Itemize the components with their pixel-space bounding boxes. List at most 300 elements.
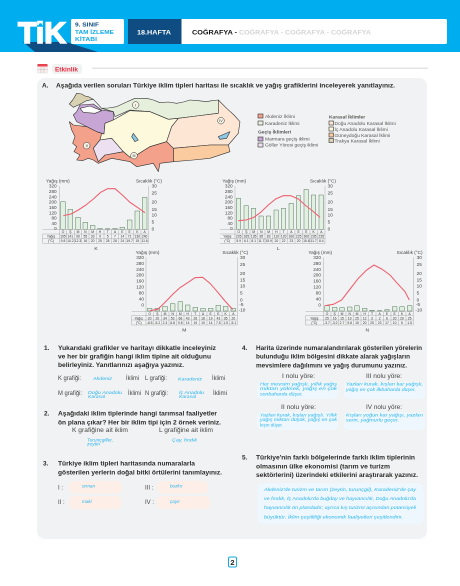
chart M: 280: [136, 261, 144, 266]
chart L: A: [320, 230, 323, 234]
chart N: M: [356, 312, 359, 316]
question 2: Turunçgiller,: [87, 438, 113, 442]
chart N: 30: [417, 255, 422, 260]
activity heading: Etkinlik: [55, 66, 79, 73]
chart K: 24: [120, 239, 124, 243]
chart L: 8.4: [319, 239, 324, 243]
question 2: [44, 410, 221, 446]
chart M: 6.8: [170, 321, 175, 325]
chart K: E: [121, 230, 124, 234]
answer: III nolu yöre: [344, 374, 425, 399]
section A instruction: Aşağıda verilen soruları Türkiye iklim tipleri haritası ile sıcaklık ve yağış grafiklerini inceleyerek yanıtlayınız.: [56, 82, 395, 89]
answer: III bozkır: III :: [145, 486, 154, 492]
chart K: 200: [49, 200, 57, 205]
chart K: M: [77, 230, 80, 234]
answer: IV nolu yöre: serin, yağmurlu geçer.: [346, 418, 399, 422]
chart N: 20: [417, 271, 422, 276]
map legend: Marmara geçiş iklimi: [265, 136, 310, 142]
chart K: 20: [91, 239, 95, 243]
chart L: 10: [328, 213, 333, 218]
week and subject bar: COĞRAFYA - COĞRAFYA - COĞRAFYA: [239, 28, 372, 36]
map legend: Doğu Anadolu Karasal İklimi: [334, 120, 396, 127]
chart L: 6.1: [244, 239, 249, 243]
chart L: 20: [274, 239, 278, 243]
chart N: 16: [333, 316, 337, 320]
chart L: 0: [230, 226, 233, 231]
chart N: -3.2: [332, 321, 338, 325]
chart M: -8.5: [147, 321, 153, 325]
region markers I to IV: I: [135, 103, 136, 107]
chart L: 22: [282, 239, 286, 243]
chart N: -3.7: [324, 321, 330, 325]
question 1: İklimi: [128, 390, 141, 397]
chart N: 12: [363, 316, 367, 320]
chart N: Sıcaklık (°C): [397, 250, 423, 255]
chart N: E: [386, 312, 389, 316]
question 1: L grafiği:: [145, 376, 167, 382]
chart N: 25: [355, 316, 359, 320]
question 1: ve her bir grafiğin hangi iklim tipine ait olduğunu: [58, 354, 211, 360]
question 1: Karasal: [179, 394, 197, 399]
chart K: 120: [49, 210, 57, 215]
chart L: M: [252, 230, 255, 234]
chart N: 320: [313, 255, 321, 260]
chart K: Sıcaklık (°C): [136, 179, 162, 184]
chart N: A: [379, 312, 382, 316]
chart L: 110: [274, 234, 279, 238]
chart L: T: [283, 230, 285, 234]
chart M: 40: [139, 297, 144, 302]
chart K: 5: [107, 234, 109, 238]
chart M: 5: [240, 290, 243, 295]
chart K: 71: [128, 234, 132, 238]
chart L: 5.9: [236, 239, 241, 243]
answer box: [257, 483, 424, 524]
chart K: 130: [135, 234, 140, 238]
chart M: 120: [136, 285, 144, 290]
chart M: 19: [201, 321, 205, 325]
chart M: 160: [136, 279, 144, 284]
map legend: Trakya Karasal İklimi: [334, 138, 380, 144]
chart M: N: [171, 312, 174, 316]
chart K: [43, 179, 162, 252]
chart L: L: [277, 246, 280, 252]
chart K: 40: [51, 221, 57, 226]
answer: I nolu yöre: sonbaharda düşer.: [260, 392, 303, 396]
chart K: E: [129, 230, 132, 234]
chart N: 120: [313, 285, 321, 290]
question 2: K grafiğine ait iklim: [72, 428, 128, 434]
chart L: 200: [225, 200, 233, 205]
chart L: 235: [319, 234, 324, 238]
main panel: [37, 78, 427, 539]
chart N: 9.8: [347, 321, 352, 325]
chart M: K: [225, 312, 228, 316]
chart K: 10: [152, 213, 157, 218]
answer: II nolu yöre: yağış miktarı düşük, yağış en çok: [259, 417, 338, 422]
chart N: 25: [417, 262, 422, 267]
chart N: N: [366, 328, 370, 334]
answer: IV çayır: çayır: [170, 499, 180, 504]
chart N: 5: [417, 290, 420, 295]
chart L: 15: [328, 207, 333, 212]
chart L: 160: [289, 234, 294, 238]
answer: III bozkır: bozkır: [170, 484, 183, 488]
chart L: 225: [296, 234, 302, 238]
chart N: 200: [313, 273, 321, 278]
map legend: Akdeniz İklimi: [265, 113, 295, 120]
chart L: 11.7: [258, 239, 265, 243]
chart M: M: [182, 328, 186, 334]
chart M: 20: [155, 316, 159, 320]
question 1: N grafiği:: [145, 391, 168, 397]
answer: III nolu yöre: Yazları kurak, kışları kar yağışlı,: [346, 382, 423, 386]
chart M: 14: [209, 321, 213, 325]
question 1: belirleyiniz. Yanıtlarınızı aşağıya yazınız.: [58, 362, 184, 369]
question 1: Karasal: [88, 394, 106, 399]
question 3: 3.: [43, 460, 49, 468]
chart M: T: [194, 312, 196, 316]
chart K: H: [99, 230, 102, 234]
chart K: Ş: [69, 230, 72, 234]
chart N: T: [371, 312, 373, 316]
activity heading: [38, 64, 428, 74]
chart K: O: [62, 230, 65, 234]
chart N: 6: [386, 316, 388, 320]
chart L: 0: [328, 227, 331, 232]
chart M: 20: [240, 271, 246, 276]
chart N: H: [363, 312, 366, 316]
chart K: (°C): [48, 239, 54, 243]
question 2: Çay, fındık: [172, 438, 198, 442]
answer: IV çayır: [145, 496, 210, 509]
chart K: 7: [114, 234, 116, 238]
chart K: Yağış (mm): [46, 179, 70, 184]
question 5: sektörlerini) üzerindeki etkilerini araştırarak yazınız.: [256, 472, 418, 479]
chart M: (°C): [136, 321, 142, 325]
answer: I nolu yöre: [257, 374, 338, 399]
page number: 2: [230, 558, 235, 567]
answer box: büyüktür. İklim çeşitliliği ekonomik faaliyetleri çeşitlendirir.: [264, 514, 403, 520]
chart L: 80: [227, 216, 233, 221]
chart N: 25: [370, 321, 374, 325]
question 2: zeytin: [86, 442, 100, 446]
chart M: -10: [239, 307, 246, 312]
answer: I orman: I :: [58, 486, 63, 492]
map legend: Karadeniz İklimi: [265, 120, 300, 127]
chart K: 55: [83, 234, 87, 238]
chart L: M: [267, 230, 270, 234]
chart L: 83: [267, 234, 271, 238]
chart N: 160: [313, 279, 321, 284]
answer: II nolu yöre: kışın düşer.: [260, 422, 283, 428]
answer: II nolu yöre: II nolu yöre:: [281, 405, 316, 411]
chart M: 20: [231, 316, 235, 320]
question 1: [44, 345, 227, 399]
answer: II maki: [58, 496, 122, 509]
chart M: 15: [240, 278, 246, 283]
chart K: A: [114, 230, 117, 234]
chart M: 34: [163, 316, 167, 320]
answer: II maki: II :: [58, 500, 65, 506]
answer: IV nolu yöre: IV nolu yöre:: [366, 405, 402, 411]
answer: I nolu yöre: I nolu yöre:: [282, 374, 315, 380]
chart M: 19: [193, 321, 197, 325]
map legend: [258, 113, 396, 148]
chart M: -5: [239, 302, 244, 307]
chart L: A: [290, 230, 293, 234]
chart N: (°C): [311, 321, 317, 325]
chart M: 14: [186, 321, 190, 325]
map legend: Göller Yöresi geçiş iklimi: [265, 142, 318, 148]
answer: III nolu yöre: III nolu yöre:: [366, 374, 402, 380]
chart L: N: [260, 230, 263, 234]
chart M: 20: [148, 316, 152, 320]
header band: [0, 0, 460, 52]
chart M: Yağış: [135, 316, 143, 320]
chart M: Sıcaklık (°C): [222, 250, 249, 255]
question 4: bulunduğu iklim bölgesini dikkate alarak yağışların: [256, 354, 410, 360]
chart N: 80: [316, 291, 321, 296]
region markers I to IV: III: [132, 154, 136, 158]
chart K: 0: [152, 227, 155, 232]
question 1: Doğu Anadolu: [88, 390, 123, 395]
answer: II maki: maki: [82, 499, 93, 504]
chart M: [132, 250, 249, 334]
chart N: 19: [348, 316, 352, 320]
question 1: İklimi: [212, 375, 225, 382]
chart L: Yağış: [223, 234, 232, 238]
question 5: [242, 454, 424, 524]
icon: calendar: [38, 64, 48, 73]
map legend: Geçiş İklimleri: [258, 128, 292, 136]
chart K: 15: [135, 239, 139, 243]
question 5: olmasının ülke ekonomisi (tarım ve turizm: [256, 463, 390, 470]
chart L: 25: [328, 190, 333, 195]
chart K: 9: [99, 234, 101, 238]
chart L: 300: [304, 234, 309, 238]
page number: [228, 557, 236, 567]
answer: IV nolu yöre: [344, 405, 425, 430]
chart K: 25: [152, 190, 157, 195]
chart N: 10: [417, 283, 422, 288]
chart N: M: [341, 312, 344, 316]
chart L: 15.9: [265, 239, 272, 243]
chart M: 1.5: [223, 321, 228, 325]
answer box: ve fındık, İç Anadolu'da buğday ve hayvancılık, Doğu Anadolu'da: [264, 495, 416, 501]
chart K: 10.2: [67, 239, 74, 243]
chart M: 35: [224, 316, 228, 320]
chart K: K: [136, 230, 139, 234]
answer: IV çayır: IV :: [145, 500, 154, 506]
book title box: [71, 19, 124, 44]
chart M: 320: [136, 255, 144, 260]
chart N: 40: [316, 297, 321, 302]
answer: I orman: [58, 481, 122, 494]
question 3: gösterilen yerlerin doğal bitki örtülerini tanımlayınız.: [58, 469, 222, 476]
question 1: K grafiği:: [58, 376, 81, 382]
question 2: 2.: [44, 410, 50, 418]
question 2: Aşağıdaki iklim tiplerinde hangi tarımsal faaliyetler: [58, 410, 218, 418]
answer: I nolu yöre: miktarı yüksek, yağış en çok: [260, 386, 338, 391]
question 5: Türkiye'nin farklı bölgelerinde farklı iklim tiplerinin: [256, 454, 415, 462]
chart K: 90: [76, 234, 80, 238]
chart L: 40: [227, 221, 233, 226]
question 2: ön plana çıkar? Her bir iklim tipi için 2 örnek veriniz.: [58, 419, 221, 426]
chart N: 20: [393, 316, 397, 320]
chart N: 3: [371, 316, 373, 320]
chart L: 226: [236, 234, 242, 238]
question 1: Yukarıdaki grafikler ve haritayı dikkatle inceleyiniz: [58, 345, 216, 352]
chart N: 15: [340, 316, 344, 320]
chart K: 160: [49, 205, 57, 210]
chart M: 43: [186, 316, 190, 320]
chart N: 280: [313, 261, 321, 266]
chart L: E: [305, 230, 308, 234]
chart L: [220, 179, 336, 252]
chart M: M: [179, 312, 182, 316]
chart N: -10: [415, 307, 422, 312]
chart L: 165: [244, 234, 249, 238]
chart K: 15: [152, 207, 157, 212]
chart L: 235: [311, 234, 317, 238]
answer: IV nolu yöre: Kışları yoğun kar yağışı, yazları: [346, 412, 424, 418]
chart N: 17: [385, 321, 389, 325]
chart N: N: [348, 312, 351, 316]
chart N: 2.7: [340, 321, 344, 325]
answer: II nolu yöre: Yazları kurak, kışları yağışlı. Yıllık: [260, 412, 338, 418]
chart K: A: [144, 230, 147, 234]
chart M: H: [186, 312, 189, 316]
chart N: 1.5: [407, 321, 412, 325]
chart N: 5: [401, 321, 403, 325]
chart L: 20: [297, 239, 301, 243]
question 5: 5.: [242, 454, 248, 462]
answer: III nolu yöre: yağış en çok ilkbaharda düşer.: [345, 387, 416, 392]
question 1: İklimi: [213, 390, 227, 397]
chart K: 320: [49, 184, 57, 189]
chart L: 120: [225, 210, 233, 215]
chart L: 135: [251, 234, 257, 238]
question 4: Harita üzerinde numaralandırılarak gösterilen yörelerin: [256, 345, 422, 352]
chart K: 240: [49, 194, 57, 199]
answer: III bozkır: [145, 481, 208, 494]
answer: I nolu yöre: Her mevsim yağışlı, yıllık yağış: [260, 382, 338, 386]
chart M: -5.1: [230, 321, 236, 325]
chart K: 25: [98, 239, 102, 243]
logo: TİK: [18, 17, 98, 52]
chart M: A: [202, 312, 205, 316]
chart L: 240: [225, 194, 233, 199]
chart L: 11.7: [311, 239, 317, 243]
chart N: 15: [355, 321, 359, 325]
chart N: K: [401, 312, 404, 316]
chart K: 30: [152, 184, 157, 189]
chart M: 53: [171, 316, 175, 320]
chart L: 320: [225, 184, 233, 189]
chart M: 18: [201, 316, 205, 320]
chart N: 15: [417, 278, 422, 283]
chart M: 200: [136, 273, 144, 278]
chart N: Yağış (mm): [308, 250, 332, 255]
chart L: 85: [259, 234, 263, 238]
chart M: 43: [216, 316, 220, 320]
chart L: Ş: [245, 230, 248, 234]
answer box: hayvancılık ön plandadır; ayrıca kış turizmi açısından potansiyeli: [264, 505, 417, 510]
chart L: H: [275, 230, 278, 234]
chart M: 25: [240, 262, 246, 267]
chart N: 20: [400, 316, 404, 320]
region markers I to IV: IV: [219, 119, 223, 123]
chart L: O: [237, 230, 240, 234]
question 3: [43, 460, 222, 509]
chart K: 12.3: [75, 239, 81, 243]
chart L: E: [298, 230, 301, 234]
chart N: 25: [325, 316, 329, 320]
chart K: 0: [54, 226, 57, 231]
chart M: O: [148, 312, 151, 316]
chart K: 5: [152, 219, 155, 224]
chart K: 141: [68, 234, 73, 238]
chart K: 28: [106, 239, 110, 243]
region markers I to IV: II: [86, 144, 88, 148]
chart M: 7.5: [216, 321, 221, 325]
chart M: 10: [240, 283, 246, 288]
chart K: 195: [60, 234, 66, 238]
chart N: 25: [408, 316, 412, 320]
chart L: 15.8: [303, 239, 310, 243]
answer box: Akdeniz'de turizm ve tarım (zeytin, turunçgil), Karadeniz'de çay: [263, 487, 417, 492]
section A instruction: A.: [42, 82, 49, 89]
chart K: 280: [49, 189, 57, 194]
chart L: 280: [225, 189, 233, 194]
chart N: [306, 250, 423, 334]
question 1: 1.: [44, 345, 50, 352]
chart M: -5.2: [154, 321, 160, 325]
chart M: 26: [193, 316, 197, 320]
chart K: 11.6: [142, 239, 148, 243]
chart M: Ş: [156, 312, 159, 316]
map legend: Güneydoğu Karasal İklimi: [334, 132, 390, 139]
map legend: İç Anadolu Karasal İklimi: [334, 126, 388, 133]
chart N: 23: [378, 321, 382, 325]
chart K: N: [84, 230, 87, 234]
chart L: 30: [328, 184, 333, 189]
chart M: M: [164, 312, 167, 316]
chart N: E: [394, 312, 397, 316]
chart K: 20: [152, 199, 157, 204]
chart N: 0: [318, 303, 321, 308]
chart K: 28: [113, 239, 117, 243]
chart K: 240: [142, 234, 148, 238]
chart M: 0: [240, 298, 243, 303]
chart M: 9.8: [178, 321, 183, 325]
chart K: K: [94, 246, 98, 252]
chart L: Sıcaklık (°C): [310, 179, 336, 184]
chart K: 80: [51, 216, 57, 221]
chart M: Yağış (mm): [136, 250, 160, 255]
chart L: Yağış (mm): [222, 179, 246, 184]
answer: I orman: orman: [82, 484, 95, 488]
chart K: 14: [120, 234, 124, 238]
chart N: 20: [363, 321, 367, 325]
chart K: 19.7: [126, 239, 133, 243]
question 1: İç Anadolu: [179, 389, 205, 395]
logo: TİK: TiK: [18, 17, 66, 50]
chart N: 240: [313, 267, 321, 272]
chart M: 240: [136, 267, 144, 272]
question 1: İklimi: [126, 375, 139, 382]
